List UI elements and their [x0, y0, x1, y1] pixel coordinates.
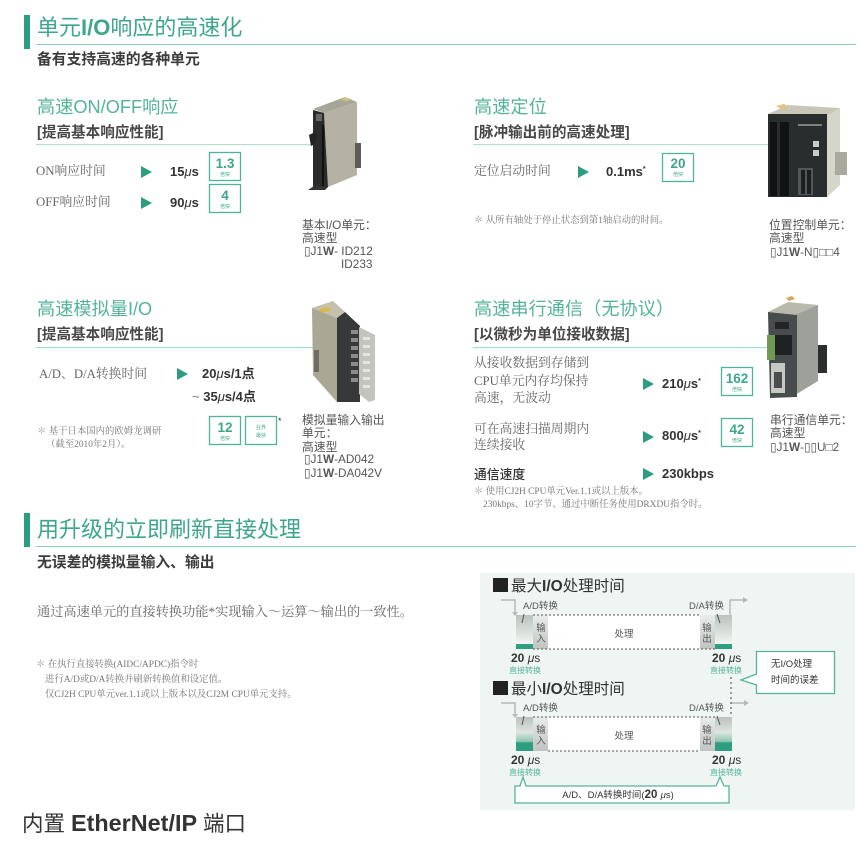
- row: 800μs: 倍快: [732, 437, 742, 444]
- row: 定位启动时间: 20: [670, 156, 686, 171]
- flow diagram: maximum: [501, 597, 748, 675]
- row: 800μs: 可在高速扫描周期内: [474, 421, 589, 436]
- flow diagram: maximum: 20 μs: [712, 651, 741, 665]
- row: 定位启动时间: 0.1ms: [606, 164, 643, 179]
- heading: 高速模拟量I/O: [37, 299, 152, 319]
- product caption: 高速型: [302, 231, 338, 245]
- subtitle: 无误差的模拟量输入、输出: [37, 553, 215, 571]
- badge: 业界最快: *: [278, 416, 282, 426]
- footnote: [37, 425, 162, 450]
- row: ON响应时间: [36, 152, 240, 180]
- footnote: ✽ 在执行直接转换(AIDC/APDC)指令时: [36, 658, 199, 670]
- row: 800μs: 800μs: [662, 428, 698, 443]
- bracket: A/D、D/A转换时间: A/D、D/A转换时间(20 μs): [562, 789, 674, 801]
- section header: 单元I/O响应的高速化: [24, 15, 856, 49]
- row: 210μs: 162: [726, 371, 748, 386]
- panel: 高速定位: [473, 97, 852, 259]
- row: A/D、D/A转换时间: [39, 366, 256, 404]
- flow diagram: minimum: 处理: [614, 730, 634, 742]
- description: 通过高速单元的直接转换功能*实现输入～运算～输出的一致性。: [37, 604, 413, 619]
- footnote: [474, 485, 707, 510]
- flow diagram: minimum: 20 μs: [511, 753, 540, 767]
- row: ON响应时间: 15μs: [170, 164, 199, 179]
- flow diagram: minimum: [501, 700, 749, 777]
- flow diagram: maximum: 直接转换: [710, 665, 742, 675]
- product caption: ▯J1W-AD042: [304, 452, 374, 466]
- footnote: ✽ 从所有轴处于停止状态到第1轴启动的时间。: [474, 214, 669, 226]
- flow diagram: minimum: 直接转换: [710, 767, 742, 777]
- row: 210μs: 210μs: [662, 376, 698, 391]
- row: 定位启动时间: *: [643, 166, 646, 173]
- flow diagram: maximum: 直接转换: [509, 665, 541, 675]
- product caption: ▯J1W-N▯□□4: [770, 245, 840, 259]
- callout: 无I/O处理时间的误差: 无I/O处理: [771, 658, 813, 670]
- section header: 单元I/O响应的高速化: 单元I/O响应的高速化: [37, 15, 242, 40]
- footnote: 230kbps、10字节、通过中断任务使用DRXDU指令时。: [483, 498, 707, 510]
- product caption: [770, 413, 853, 454]
- subheading: [以微秒为单位接收数据]: [474, 325, 630, 343]
- row: A/D、D/A转换时间: A/D、D/A转换时间: [39, 366, 147, 381]
- product caption: ID233: [341, 257, 373, 271]
- product caption: 位置控制单元：: [769, 218, 852, 232]
- flow diagram: minimum: 输: [536, 724, 546, 736]
- footnote: ✽ 基于日本国内的欧姆龙调研: [37, 425, 162, 437]
- flow diagram: minimum: D/A转换: [689, 702, 724, 714]
- badge: 12倍快: 12: [217, 420, 233, 435]
- bracket: A/D、D/A转换时间: [515, 777, 729, 803]
- row: 通信速度: 230kbps: [662, 466, 714, 481]
- footnote: [36, 658, 297, 700]
- product caption: 串行通信单元：: [770, 413, 853, 427]
- heading: 最大I/O处理时间: 最大I/O处理时间: [511, 577, 625, 595]
- heading: 高速串行通信（无协议）: [474, 299, 674, 319]
- product caption: ▯J1W- ID212: [304, 244, 373, 258]
- flow diagram: maximum: 20 μs: [511, 651, 540, 665]
- footnote: 进行A/D或D/A转换并刷新转换值和设定值。: [45, 673, 227, 685]
- section header: 用升级的立即刷新直接处理: 用升级的立即刷新直接处理: [37, 517, 301, 542]
- row: 800μs: 42: [729, 422, 745, 437]
- dotted connector: [730, 677, 732, 717]
- product photo: analog I/O unit: [312, 301, 375, 402]
- footnote: （截至2010年2月）。: [46, 438, 130, 450]
- row: 210μs: CPU单元内存均保持: [474, 373, 589, 388]
- subheading: [脉冲输出前的高速处理]: [474, 123, 630, 141]
- subheading: [提高基本响应性能]: [37, 123, 164, 141]
- heading: 高速定位: [474, 97, 547, 117]
- section header: 用升级的立即刷新直接处理: [24, 513, 856, 547]
- badge: 业界最快: [246, 416, 282, 444]
- row: 210μs: 从接收数据到存储到: [474, 355, 589, 370]
- product caption: 高速型: [769, 231, 805, 245]
- flow diagram: minimum: 出: [702, 735, 712, 747]
- product caption: ▯J1W-DA042V: [304, 466, 382, 480]
- row: 定位启动时间: 倍快: [673, 171, 683, 178]
- panel: 高速模拟量I/O: [36, 299, 385, 480]
- subheading: [提高基本响应性能]: [37, 325, 164, 343]
- flow diagram: maximum: 处理: [614, 628, 634, 640]
- flow diagram: maximum: D/A转换: [689, 600, 724, 612]
- row: OFF响应时间: 倍快: [220, 203, 230, 210]
- flow diagram: minimum: 输: [702, 724, 712, 736]
- row: ON响应时间: 倍快: [220, 171, 230, 178]
- row: 通信速度: [474, 466, 714, 482]
- row: OFF响应时间: 90μs: [170, 195, 199, 210]
- flow diagram: maximum: A/D转换: [523, 600, 558, 612]
- product caption: 基本I/O单元：: [302, 218, 377, 232]
- subtitle: 备有支持高速的各种单元: [37, 50, 200, 68]
- row: 定位启动时间: [474, 154, 694, 182]
- flow diagram: minimum: 直接转换: [509, 767, 541, 777]
- product caption: 高速型: [770, 426, 806, 440]
- row: A/D、D/A转换时间: ~ 35μs/4点: [192, 389, 256, 404]
- flow diagram: maximum: 输: [702, 622, 712, 634]
- badge: 业界最快: 业界: [256, 424, 266, 431]
- bottom heading: 内置 EtherNet/IP 端口: [22, 810, 246, 836]
- badge: 业界最快: 最快: [256, 432, 266, 439]
- row: OFF响应时间: [36, 184, 240, 212]
- product caption: 单元：: [302, 426, 337, 440]
- row: 800μs: *: [698, 430, 701, 437]
- footnote: ✽ 使用CJ2H CPU单元Ver.1.1或以上版本。: [474, 485, 648, 497]
- row: 800μs: 连续接收: [474, 437, 525, 452]
- row: OFF响应时间: OFF响应时间: [36, 194, 111, 209]
- row: ON响应时间: 1.3: [216, 156, 235, 171]
- row: ON响应时间: ON响应时间: [36, 163, 106, 178]
- product photo: basic I/O unit: [308, 97, 361, 190]
- row: 通信速度: 通信速度: [474, 467, 525, 482]
- badge: 12倍快: [210, 416, 240, 444]
- product caption: 高速型: [302, 440, 338, 454]
- row: 210μs: *: [698, 378, 701, 385]
- product caption: [302, 413, 385, 480]
- product caption: [302, 218, 377, 271]
- callout: 无I/O处理时间的误差: 时间的误差: [771, 674, 819, 686]
- row: OFF响应时间: 4: [221, 188, 229, 203]
- flow diagram: maximum: 输: [536, 622, 546, 634]
- row: 定位启动时间: 定位启动时间: [474, 163, 551, 178]
- row: 800μs: [474, 418, 752, 452]
- flow diagram: minimum: 入: [536, 736, 546, 747]
- product caption: ▯J1W-▯▯U□2: [770, 440, 839, 454]
- flow diagram: minimum: A/D转换: [523, 702, 558, 714]
- heading: 高速ON/OFF响应: [37, 97, 178, 117]
- panel: I/O processing time diagram: [480, 573, 855, 810]
- flow diagram: minimum: 20 μs: [712, 753, 741, 767]
- product photo: position control unit: [768, 104, 847, 197]
- flow diagram: maximum: 入: [536, 634, 546, 645]
- row: 210μs: 高速，无波动: [474, 390, 551, 406]
- product caption: 模拟量输入输出: [302, 413, 385, 427]
- product photo: serial communication unit: [767, 296, 827, 398]
- badge: 12倍快: 倍快: [220, 435, 230, 442]
- panel: 高速ON/OFF响应: [36, 97, 377, 271]
- flow diagram: maximum: 出: [702, 633, 712, 645]
- row: 210μs: 倍快: [732, 386, 742, 393]
- heading: 最小I/O处理时间: 最小I/O处理时间: [511, 680, 625, 698]
- panel: 高速串行通信（无协议）: [473, 296, 853, 510]
- product caption: [769, 218, 852, 259]
- row: A/D、D/A转换时间: 20μs/1点: [202, 366, 255, 381]
- footnote: 仅CJ2H CPU单元ver.1.1或以上版本以及CJ2M CPU单元支持。: [45, 688, 297, 700]
- row: 210μs: [474, 355, 752, 406]
- callout: 无I/O处理时间的误差: [741, 652, 834, 694]
